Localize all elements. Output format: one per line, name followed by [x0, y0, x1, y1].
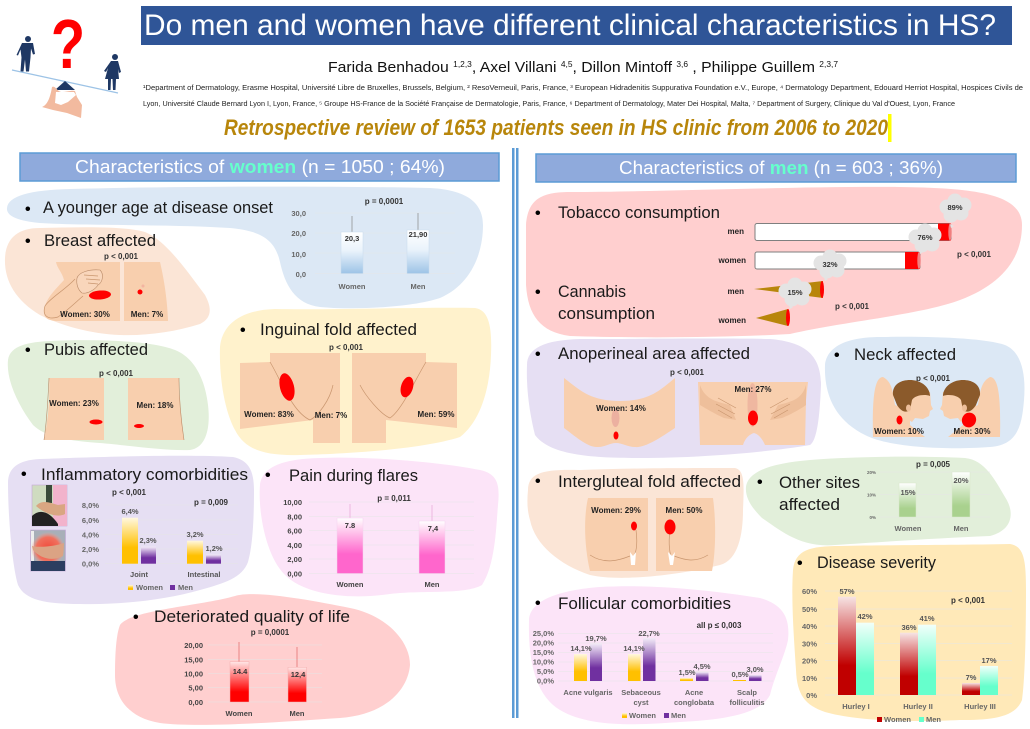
illustration: female buttocks: Women: 29%	[591, 506, 641, 515]
panel: pain during flares	[260, 458, 499, 596]
panel: tobacco and cannabis consumption: p < 0,001	[835, 302, 870, 311]
panel: disease severity: Disease severity	[817, 553, 936, 572]
subtitle: retrospective review: Retrospective review of 1653 patients seen in HS clinic from 2006 to 2020	[224, 115, 889, 140]
chart: Hurley stage bars: 41%	[919, 614, 935, 623]
chart: joint and intestinal comorbidity: 0,0%	[82, 560, 99, 568]
illustration: female anoperineal: Women: 14%	[596, 404, 646, 413]
chart: quality of life bars: Men	[290, 709, 305, 718]
panel: anoperineal area affected: p < 0,001	[670, 368, 705, 377]
panel: follicular comorbidities	[529, 586, 788, 724]
panel: follicular comorbidities: •	[535, 595, 541, 612]
panel: neck affected: p < 0,001	[916, 374, 951, 383]
chart: other sites bars: 15%	[900, 488, 916, 497]
illustration: female breast	[44, 262, 120, 321]
heading: characteristics of men: Characteristics of men (n = 603 ; 36%)	[619, 158, 943, 178]
chart: Hurley stage bars: 60%	[802, 587, 817, 596]
affiliations: ¹Department of Dermatology, Erasme Hospital, Université Libre de Bruxelles, Brussels, Belgium, ² ResoVerneuil, Paris, France, ³ European Hidradenitis Suppurativa Foundation e.V., Europe, ⁴ Dermatology Department, Edouard Herriot Hospital, Hospices Civils de	[143, 85, 1023, 92]
chart: Hurley stage bars: Hurley II	[903, 702, 933, 711]
chart: age at onset bars: 20,3	[345, 234, 359, 243]
chart: pain score bars: 7.8	[345, 521, 355, 530]
illustration: female inguinal fold	[240, 353, 347, 443]
chart: joint and intestinal comorbidity: Intestinal	[188, 570, 220, 579]
chart: age at onset bars: Women	[339, 282, 366, 291]
icon: balance with man, woman and question mark: ?	[51, 6, 85, 83]
panel: pubis affected: Pubis affected	[44, 340, 148, 359]
heading: characteristics of women: Characteristics of women (n = 1050 ; 64%)	[75, 157, 445, 177]
chart: follicular comorbidities bars	[533, 621, 773, 720]
chart: Hurley stage bars	[802, 587, 1012, 724]
panel: tobacco and cannabis consumption: Tobacco consumption	[558, 203, 720, 222]
panel: other sites affected: affected	[779, 495, 840, 514]
chart: age at onset bars: Men	[410, 282, 426, 291]
chart: Hurley stage bars: 42%	[857, 612, 873, 621]
chart: pain score bars: Men	[424, 580, 440, 589]
chart: follicular comorbidities bars: 25,0%	[533, 629, 554, 638]
chart: follicular comorbidities bars: 1,5%	[678, 668, 696, 677]
chart: follicular comorbidities bars: cyst	[633, 698, 649, 707]
panel: follicular comorbidities: Follicular comorbidities	[558, 594, 731, 613]
panel: tobacco and cannabis consumption	[526, 187, 1022, 337]
panel: anoperineal area affected	[527, 339, 821, 458]
illustration: male anoperineal	[698, 382, 808, 445]
chart: pain score bars	[283, 494, 474, 589]
chart: other sites bars: Men	[954, 524, 969, 533]
chart: follicular comorbidities bars: 0,0%	[537, 676, 554, 686]
cigarette: men	[755, 224, 952, 240]
chart: other sites bars: 20%	[867, 470, 876, 475]
cigarette: women	[755, 252, 921, 269]
panel: pain during flares: •	[265, 467, 271, 484]
chart: Hurley stage bars: 20%	[802, 656, 817, 666]
panel: inflammatory comorbidities	[8, 456, 254, 604]
chart: follicular comorbidities bars: conglobata	[674, 698, 715, 707]
chart: follicular comorbidities bars: 3,0%	[746, 665, 764, 674]
chart: pain score bars: 2,00	[287, 555, 302, 564]
panel: inguinal fold affected: Inguinal fold affected	[260, 320, 417, 339]
illustration: female buttocks	[585, 498, 648, 571]
chart: pain score bars: p = 0,011	[377, 494, 411, 503]
chart: other sites bars: 20%	[953, 476, 969, 485]
chart: joint and intestinal comorbidity	[82, 488, 238, 592]
illustration: male inguinal fold: Men: 59%	[418, 410, 454, 419]
chart: quality of life bars: 12,4	[291, 670, 306, 679]
affiliations: Lyon, Université Claude Bernard Lyon I, Lyon, France, ⁵ Groupe HS-France de la Société Française de Dermatologie, Paris, France, ⁶ Department of Dermatology, Mater Dei Hospital, Malta, ⁷ Department of Surgery, Clinique du Val d'Ouest, Lyon, France	[143, 101, 955, 108]
chart: quality of life bars: 20,00	[184, 641, 203, 650]
panel: intergluteal fold affected: Intergluteal fold affected	[558, 472, 741, 491]
chart: Hurley stage bars: 17%	[981, 656, 997, 665]
authors: , Axel Villani	[472, 59, 561, 76]
illustration: female anoperineal	[564, 378, 675, 447]
panel: other sites affected: •	[757, 474, 763, 491]
chart: follicular comorbidities bars: Acne	[685, 688, 703, 697]
illustration: male pubis: Men: 18%	[137, 401, 173, 410]
chart: joint and intestinal comorbidity: 3,2%	[186, 530, 204, 539]
illustration: female neck	[873, 377, 933, 437]
chart: follicular comorbidities bars: 14,1%	[570, 644, 592, 653]
panel: pubis affected	[8, 340, 209, 450]
illustration: male neck	[940, 377, 1000, 437]
illustration: female pubis	[44, 378, 104, 440]
chart: quality of life bars: p = 0,0001	[251, 628, 290, 637]
chart: follicular comorbidities bars: 22,7%	[638, 629, 660, 638]
chart: Hurley stage bars: 50%	[802, 605, 817, 614]
illustration: male chest	[124, 262, 168, 321]
chart: follicular comorbidities bars: 15,0%	[533, 648, 554, 657]
labels: smoking groups	[717, 227, 746, 325]
chart: follicular comorbidities bars: Scalp	[737, 688, 757, 697]
panel: breast affected: •	[25, 233, 31, 250]
chart: pain score bars: 6,00	[287, 526, 302, 536]
labels: smoking groups: women	[717, 256, 746, 265]
chart: age at onset bars: 21,90	[409, 230, 427, 239]
authors: , Dillon Mintoff	[573, 59, 676, 76]
chart: follicular comorbidities bars: 4,5%	[693, 662, 711, 671]
smoke cloud: 15%	[778, 278, 812, 309]
chart: quality of life bars: 15,00	[184, 656, 203, 664]
affiliations	[143, 85, 1023, 108]
chart: follicular comorbidities bars: 10,0%	[533, 658, 554, 666]
smoke cloud: 89%	[940, 194, 972, 228]
panel: neck affected	[825, 337, 1024, 448]
panel: pubis affected: •	[25, 342, 31, 359]
chart: Hurley stage bars: p < 0,001	[951, 596, 986, 605]
chart: quality of life bars: 10,00	[184, 670, 203, 678]
chart: follicular comorbidities bars: folliculitis	[729, 698, 765, 707]
smoke cloud: 15%: 15%	[787, 288, 803, 297]
panel: age at onset	[7, 187, 483, 308]
panel: inguinal fold affected	[220, 308, 491, 455]
legend	[128, 583, 193, 592]
illustration: male anoperineal: Men: 27%	[735, 385, 771, 394]
chart: quality of life bars: 14.4	[233, 667, 248, 676]
chart: follicular comorbidities bars: 0,5%	[731, 670, 749, 679]
chart: follicular comorbidities bars: all p ≤ 0,003	[697, 621, 742, 630]
chart: quality of life bars: Women	[226, 709, 253, 718]
panel: anoperineal area affected: •	[535, 346, 541, 363]
chart: age at onset bars: 0,0	[296, 270, 306, 279]
heading: characteristics of women	[20, 153, 499, 181]
heading: characteristics of men	[536, 154, 1016, 182]
panel: other sites affected: Other sites	[779, 473, 860, 492]
illustration: female breast: Women: 30%	[60, 310, 110, 319]
panel: inflammatory comorbidities: Inflammatory comorbidities	[41, 465, 248, 484]
illustration: female pubis: Women: 23%	[49, 399, 99, 408]
chart: age at onset bars: 10,0	[291, 250, 306, 259]
authors: Farida Benhadou	[328, 59, 443, 76]
legend: Women	[884, 715, 911, 724]
panel: tobacco and cannabis consumption: p < 0,001	[957, 250, 992, 259]
legend: Men	[178, 583, 193, 592]
chart: pain score bars: 0,00	[287, 570, 302, 578]
chart: other sites bars: Women	[895, 524, 922, 533]
chart: follicular comorbidities bars: 5,0%	[537, 667, 554, 676]
chart: other sites bars: p = 0,005	[916, 460, 951, 469]
smoke cloud: 32%: 32%	[822, 260, 838, 269]
chart: joint and intestinal comorbidity: p = 0,009	[194, 498, 229, 507]
chart: joint and intestinal comorbidity: 4,0%	[82, 530, 99, 540]
chart: pain score bars: 8,00	[287, 512, 302, 522]
illustration: female inguinal fold: Men: 7%	[315, 411, 347, 420]
panel: deteriorated quality of life: •	[133, 609, 139, 626]
panel: inguinal fold affected: p < 0,001	[329, 343, 364, 352]
legend	[877, 715, 941, 724]
chart: Hurley stage bars: 10%	[802, 674, 817, 683]
labels: smoking groups: women	[717, 316, 746, 325]
panel: pubis affected: p < 0,001	[99, 369, 134, 378]
chart: follicular comorbidities bars: 14,1%	[623, 644, 645, 653]
chart: age at onset bars: p = 0,0001	[365, 197, 404, 206]
illustration: male buttocks	[656, 498, 715, 571]
chart: age at onset bars: 30,0	[291, 209, 306, 218]
labels: smoking groups: men	[728, 287, 744, 296]
chart: joint and intestinal comorbidity: Joint	[130, 570, 148, 579]
chart: follicular comorbidities bars: 20,0%	[533, 638, 554, 648]
legend	[622, 711, 686, 720]
panel: tobacco and cannabis consumption: consumption	[558, 304, 655, 323]
panel: deteriorated quality of life: Deteriorated quality of life	[154, 607, 350, 626]
legend: Men	[926, 715, 941, 724]
chart: Hurley stage bars: Hurley I	[842, 702, 870, 711]
authors: 2,3,7	[819, 60, 839, 69]
panel: deteriorated quality of life	[115, 594, 410, 725]
panel: pain during flares: Pain during flares	[289, 466, 418, 485]
chart: Hurley stage bars: 0%	[806, 691, 817, 700]
chart: joint and intestinal comorbidity: 6,4%	[121, 507, 139, 516]
panel: anoperineal area affected: Anoperineal area affected	[558, 344, 750, 363]
panel: disease severity	[792, 544, 1026, 724]
illustration: male chest: Men: 7%	[131, 310, 163, 319]
panel: neck affected: •	[834, 347, 840, 364]
legend: Women	[136, 583, 163, 592]
smoke cloud: 76%: 76%	[917, 233, 933, 242]
title banner: Do men and women have different clinical characteristics in HS?	[144, 9, 996, 42]
authors: 4,5	[561, 60, 573, 69]
chart: other sites bars: 0%	[869, 515, 876, 520]
chart: joint and intestinal comorbidity: 8,0%	[82, 501, 99, 510]
legend: Women	[629, 711, 656, 720]
chart: pain score bars: 4,00	[287, 541, 302, 550]
chart: Hurley stage bars: 30%	[802, 640, 817, 648]
panel: disease severity: •	[797, 555, 803, 572]
chart: other sites bars: 10%	[867, 492, 876, 498]
authors: 3,6	[676, 60, 689, 69]
labels: smoking groups: men	[728, 227, 744, 236]
illustration: male inguinal fold	[352, 353, 457, 443]
panel: age at onset: •	[25, 201, 31, 218]
chart: Hurley stage bars: 7%	[966, 673, 977, 682]
panel: intergluteal fold affected	[527, 468, 744, 578]
panel: other sites affected	[746, 457, 1011, 545]
chart: Hurley stage bars: 36%	[901, 623, 917, 632]
illustration: male neck: Men: 30%	[954, 427, 990, 436]
legend: Men	[671, 711, 686, 720]
chart: quality of life bars: 0,00	[188, 698, 203, 707]
panel: inflammatory comorbidities: •	[21, 466, 27, 483]
chart: joint and intestinal comorbidity: 2,3%	[139, 536, 157, 545]
authors: , Philippe Guillem	[688, 59, 819, 76]
smoke cloud: 76%	[908, 224, 942, 254]
panel: breast affected: p < 0,001	[104, 252, 139, 261]
chart: Hurley stage bars: 57%	[839, 587, 855, 596]
illustration: male buttocks: Men: 50%	[666, 506, 702, 515]
smoke cloud: 89%: 89%	[947, 203, 963, 212]
panel: intergluteal fold affected: •	[535, 473, 541, 490]
smoke cloud: 32%	[814, 250, 846, 281]
panel: age at onset: A younger age at disease onset	[43, 198, 273, 217]
chart: follicular comorbidities bars: 19,7%	[585, 634, 607, 643]
authors: 1,2,3	[453, 60, 472, 69]
chart: follicular comorbidities bars: Sebaceous	[621, 688, 661, 697]
panel: breast affected	[5, 227, 210, 335]
central divider	[512, 148, 518, 718]
panel: tobacco and cannabis consumption: •	[535, 205, 541, 222]
panel: tobacco and cannabis consumption: •	[535, 284, 541, 301]
panel: neck affected: Neck affected	[854, 345, 956, 364]
chart: joint and intestinal comorbidity: 1,2%	[205, 544, 223, 553]
chart: pain score bars: Women	[337, 580, 364, 589]
chart: joint and intestinal comorbidity: 2,0%	[82, 545, 99, 554]
chart: joint and intestinal comorbidity: 6,0%	[82, 516, 99, 525]
panel: tobacco and cannabis consumption: Cannabis	[558, 282, 626, 301]
illustration: female neck: Women: 10%	[874, 427, 924, 436]
chart: follicular comorbidities bars: Acne vulgaris	[563, 688, 613, 697]
chart: quality of life bars	[184, 628, 322, 718]
chart: Hurley stage bars: Hurley III	[964, 702, 996, 711]
chart: pain score bars: 7,4	[428, 524, 439, 533]
chart: pain score bars: 10,00	[283, 498, 302, 507]
panel: inguinal fold affected: •	[240, 322, 246, 339]
photo: intestinal pain	[30, 530, 66, 571]
chart: quality of life bars: 5,00	[188, 684, 203, 692]
joint: men	[754, 281, 824, 298]
photo: joint pain	[32, 485, 67, 526]
joint: women	[756, 309, 790, 326]
chart: other sites bars	[867, 460, 990, 533]
chart: joint and intestinal comorbidity: p < 0,001	[112, 488, 147, 497]
illustration: female inguinal fold: Women: 83%	[244, 410, 294, 419]
chart: age at onset bars: 20,0	[291, 229, 306, 238]
panel: breast affected: Breast affected	[44, 231, 156, 250]
chart: Hurley stage bars: 40%	[802, 622, 817, 631]
illustration: male pubis	[128, 378, 184, 440]
chart: age at onset bars	[291, 197, 455, 291]
icon: balance with man, woman and question mark	[12, 6, 121, 118]
